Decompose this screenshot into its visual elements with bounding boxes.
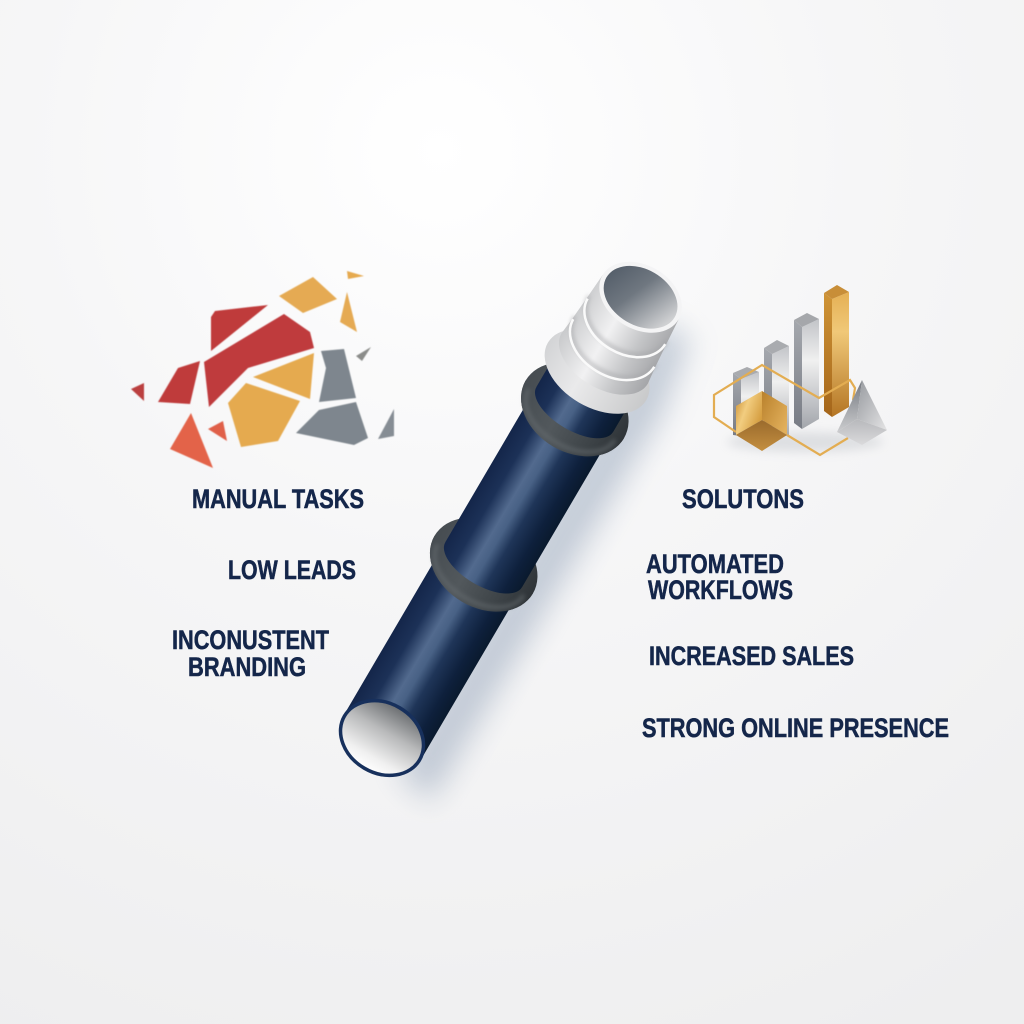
label: manual tasks: MANUAL TASKS xyxy=(192,484,364,514)
label: automated workflows xyxy=(646,549,793,605)
shard: amber large xyxy=(228,383,300,447)
lower ring front xyxy=(413,536,533,631)
icon: bar chart with cube and pyramid (solutions) xyxy=(714,285,887,455)
shard: red upper xyxy=(211,305,268,351)
top section xyxy=(571,274,680,372)
pipe with connector and rings xyxy=(315,241,724,808)
shard: coral small xyxy=(208,421,227,441)
gold hexagon outline xyxy=(714,365,855,455)
label: automated workflows: WORKFLOWS xyxy=(648,575,793,605)
label: inconsistent branding xyxy=(172,625,329,682)
label: strong online presence: STRONG ONLINE PRESENCE xyxy=(642,713,949,743)
shard: coral large xyxy=(170,413,213,468)
pipe shadow xyxy=(393,322,702,803)
top ridge xyxy=(571,296,667,372)
heading: solutions: SOLUTONS xyxy=(682,484,804,514)
middle section xyxy=(556,297,668,396)
label: automated workflows: AUTOMATED xyxy=(646,549,784,579)
bar 1 xyxy=(733,367,759,436)
shard: grey lower xyxy=(296,402,368,445)
text: solutions list xyxy=(642,484,949,743)
label: inconsistent branding: INCONUSTENT xyxy=(172,625,329,655)
pipe bottom opening xyxy=(327,686,437,790)
label: inconsistent branding: BRANDING xyxy=(188,652,306,682)
shard: amber sliver xyxy=(340,292,357,332)
ring backs xyxy=(413,343,646,631)
text: problems list xyxy=(172,484,364,682)
shard: grey upper xyxy=(319,349,356,402)
shard: red small xyxy=(131,383,144,401)
lower section xyxy=(546,318,657,410)
label: increased sales: INCREASED SALES xyxy=(649,641,854,671)
middle ridge xyxy=(557,317,656,395)
shard: grey tiny xyxy=(356,347,371,361)
upper ring front xyxy=(504,381,624,475)
label: low leads: LOW LEADS xyxy=(228,555,356,585)
shard: red centre xyxy=(204,314,314,407)
bar 4 gold xyxy=(824,285,849,417)
bar 3 xyxy=(794,313,819,429)
bar 2 xyxy=(764,340,789,440)
shard: grey right xyxy=(378,409,394,439)
white connector xyxy=(530,241,706,431)
top opening xyxy=(586,247,695,347)
chart shadow xyxy=(727,432,883,452)
gold cube xyxy=(736,391,787,451)
shard: amber middle xyxy=(253,353,314,399)
shard: amber top xyxy=(279,277,337,313)
shard: amber tiny xyxy=(347,271,364,279)
shard: red left xyxy=(158,361,200,404)
pipe body xyxy=(344,353,633,761)
collar xyxy=(530,312,664,431)
silver pyramid xyxy=(837,380,887,445)
icon: shattered shards (problems) xyxy=(131,271,394,468)
